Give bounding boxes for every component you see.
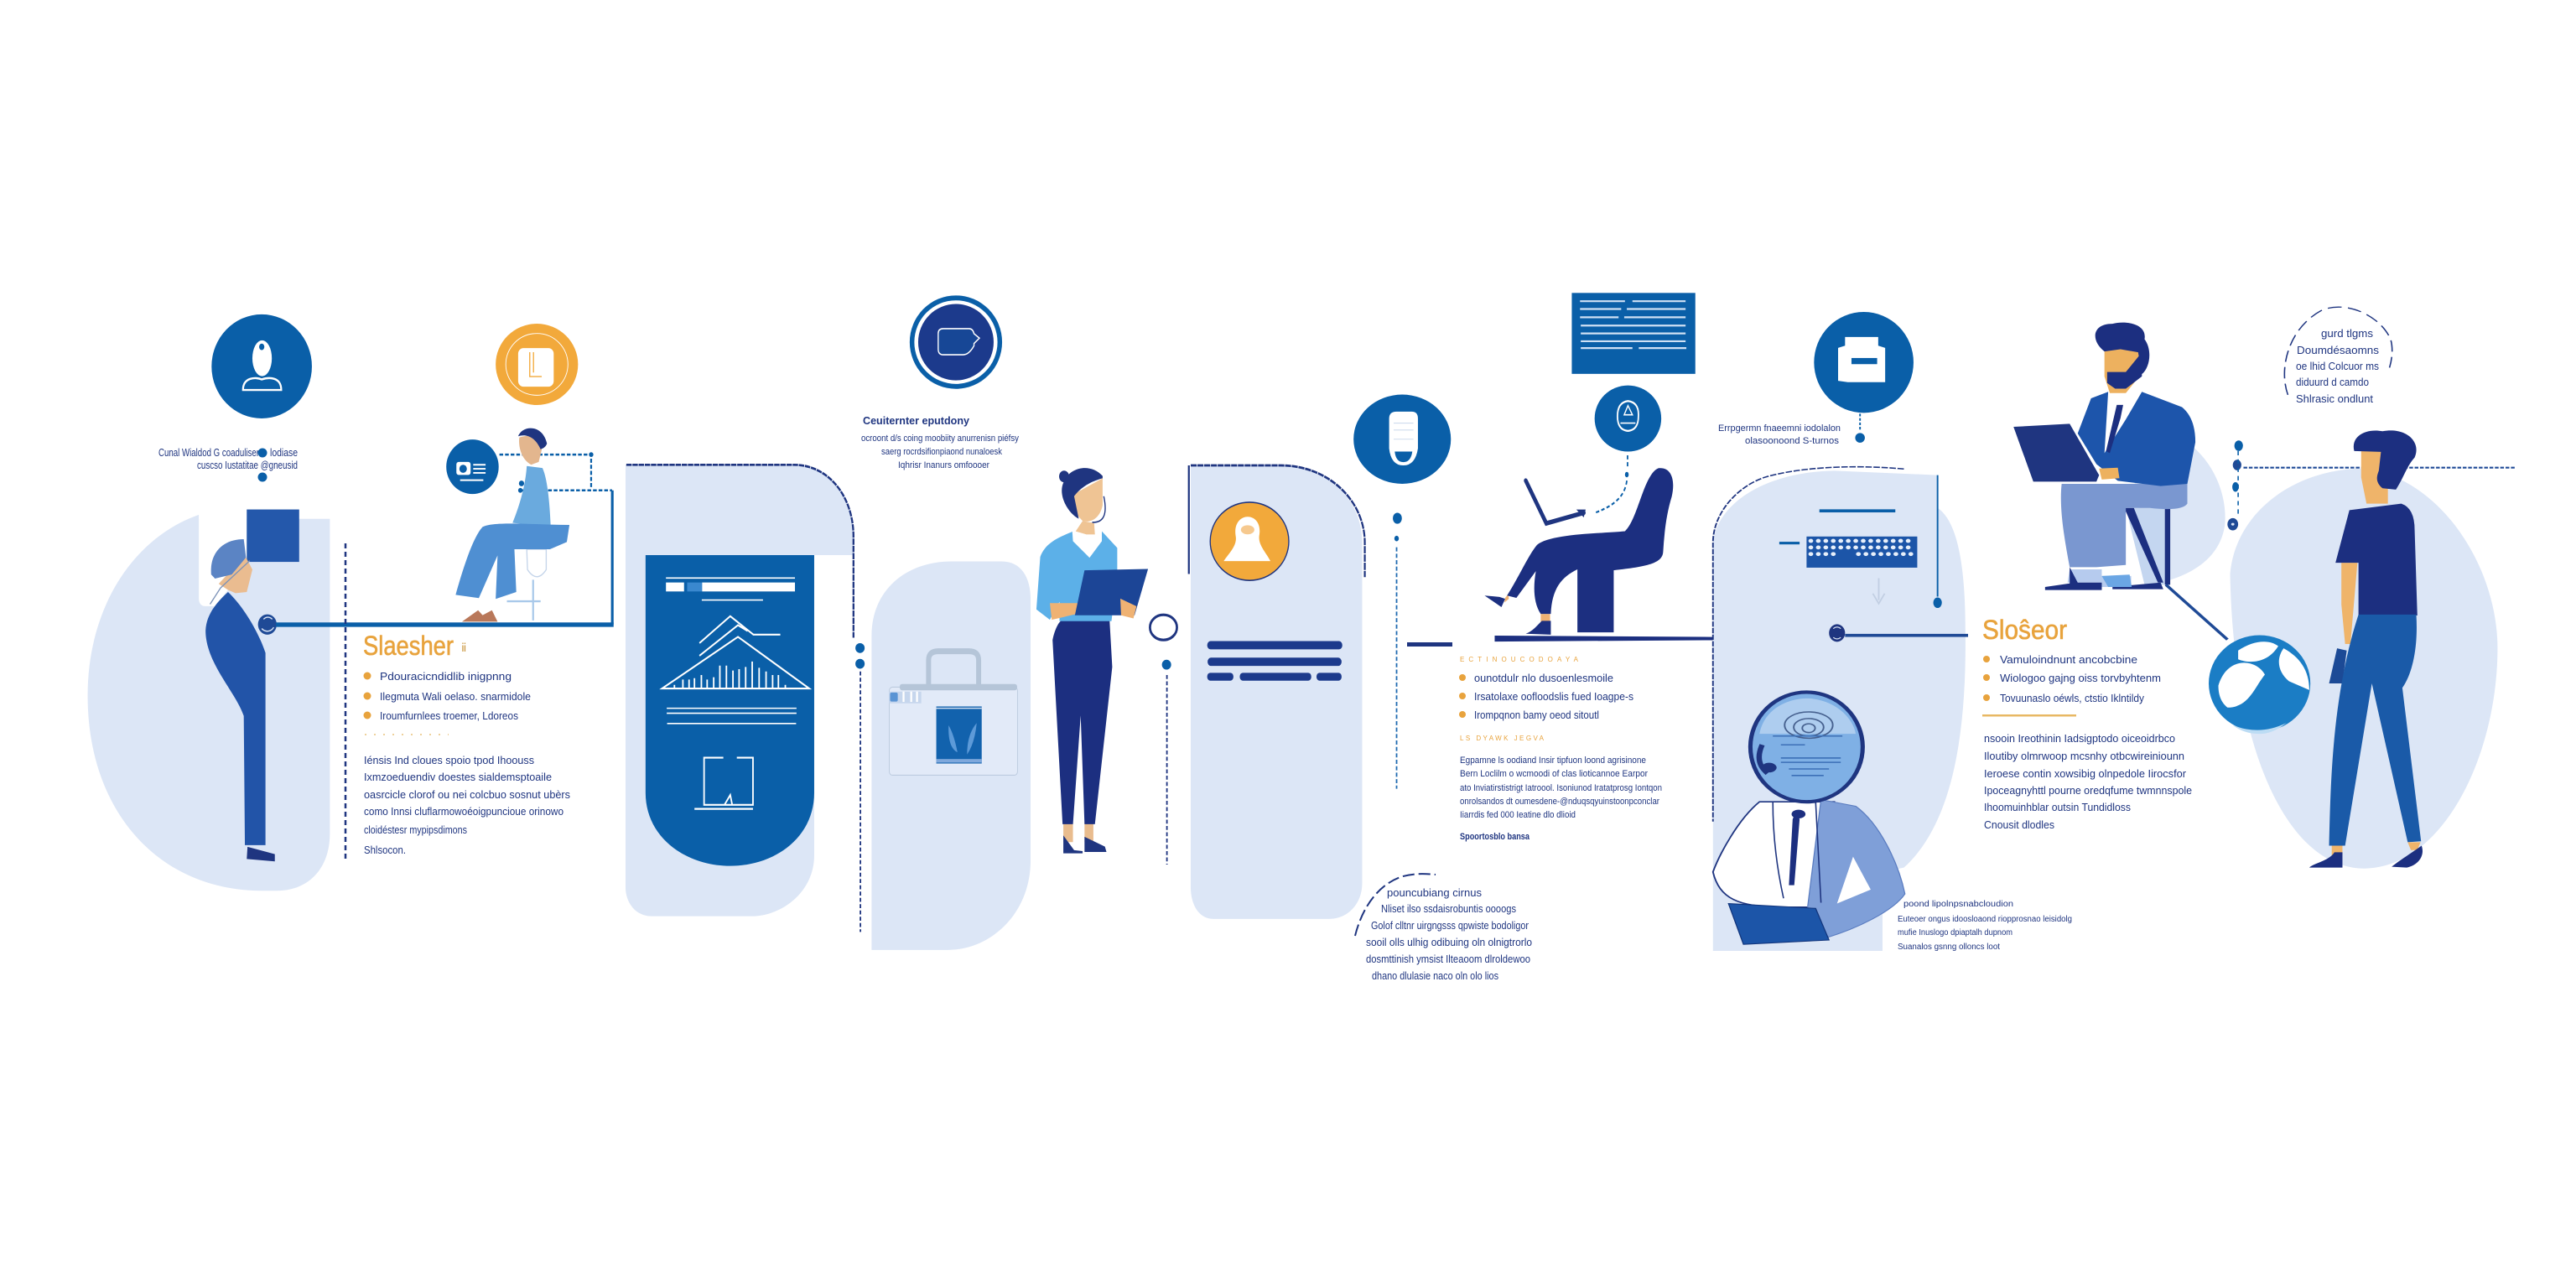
caption under person circle: Cunal Wialdod G coaduliser — [158, 446, 259, 459]
figure: seated man with laptop — [2013, 323, 2227, 640]
bullet list: Iroumfurnlees troemer, Ldoreos — [380, 709, 518, 722]
bullet list: Pdouracicndidlib inigpnng — [380, 670, 512, 683]
heading: Sloŝeor: Sloŝeor — [1982, 615, 2067, 645]
icon: orange badge — [496, 324, 578, 405]
orange underline — [1982, 714, 2076, 716]
callout text top right: Doumdésaomns — [2297, 344, 2380, 356]
callout text — [1366, 886, 1532, 982]
icon: document rectangle — [1571, 293, 1696, 374]
background blob 5 — [1713, 470, 1966, 951]
bullet list: Vamuloindnunt ancobcbine — [2000, 653, 2137, 666]
bullet list: Irompqnon bamy oeod sitoutl — [1474, 709, 1599, 721]
bullet list: Wiologoo gajng oiss torvbyhtenm — [2000, 672, 2161, 684]
dashed arc callout — [1355, 874, 1436, 936]
caption text lower: mufie Inuslogo dpiaptalh dupnom — [1898, 928, 2012, 937]
callout text: Nliset ilso ssdaisrobuntis oooogs — [1381, 902, 1516, 915]
panel: step 8 laptop man and walking person — [2013, 307, 2516, 869]
background blob 4 — [1191, 465, 1362, 919]
callout text: dhano dlulasie naco oln olo lios — [1372, 969, 1498, 982]
caption text: Errpgermn fnaeemni iodolalon — [1718, 423, 1841, 434]
paragraph text: Cnousit dlodles — [1984, 818, 2054, 831]
paragraph text — [1984, 732, 2192, 831]
caption under person circle — [158, 446, 298, 481]
caption text: olasoonoond S-turnos — [1745, 436, 1840, 446]
bullet list: Tovuunaslo oéwls, ctstio Iklntildy — [2000, 692, 2144, 704]
bullet list: Ilegmuta Wali oelaso. snarmidole — [380, 690, 531, 703]
figure: person with blue square — [205, 510, 299, 861]
background ellipse behind seated man — [2134, 442, 2225, 584]
figure: woman with tablet — [1036, 468, 1148, 854]
background blob 2 — [626, 465, 854, 917]
heading: Slaesher: Slaesher — [363, 631, 454, 661]
bullet list: ounotdulr nlo dusoenlesmoile — [1474, 672, 1613, 684]
background ellipse behind walking person — [2231, 469, 2497, 869]
paragraph text: Ihoomuinhblar outsin Tundidloss — [1984, 801, 2131, 813]
callout text top right — [2296, 327, 2380, 405]
heading accent label: ECTINOUCODOAYA — [1460, 656, 1579, 663]
paragraph text: Iiarrdis fed 000 Ieatine dlo dlioid — [1460, 810, 1576, 820]
background blob 3 — [871, 561, 1031, 950]
paragraph text: como Innsi cluflarmowoéoigpuncioue orinowo — [364, 805, 564, 818]
caption text lower: Suanalos gsnng olloncs loot — [1898, 943, 2000, 952]
card border dashed — [1191, 465, 1365, 577]
paragraph text: onrolsandos dt oumesdene-@nduqsqyuinstoonpconclar — [1460, 797, 1659, 807]
caption heading and text: saerg rocrdsifionpiaond nunaloesk — [881, 447, 1002, 457]
paragraph text: Ipoceagnyhttl pourne oredqfume twmnnspole — [1984, 784, 2192, 797]
icon: orange person badge — [1210, 502, 1289, 580]
figure: walking person — [2309, 430, 2423, 868]
dashed horizontal and dots — [2227, 440, 2516, 530]
caption under person circle: lodiase — [270, 446, 298, 459]
paragraph text: cloidéstesr mypipsdimons — [364, 823, 467, 836]
callout text top right: oe lhid Colcuor ms — [2296, 360, 2379, 372]
callout text: dosmttinish ymsist Ilteaoom dlroldewoo — [1366, 953, 1530, 965]
vertical dashed divider — [345, 543, 346, 861]
paragraph text — [1460, 756, 1662, 842]
paragraph text: Ixmzoeduendiv doestes sialdemsptoaile — [364, 771, 552, 783]
paragraph text: nsooin Ireothinin Iadsigptodo oiceoidrbco — [1984, 732, 2175, 745]
panel: step 7 text column Sloseor — [1982, 615, 2192, 831]
paragraph text: oasrcicle clorof ou nei colcbuo sosnut ubèrs — [364, 788, 570, 801]
caption text lower — [1898, 900, 2072, 952]
icon: blue document circle — [1814, 312, 1914, 443]
panel: step 3 woman and briefcase — [861, 295, 1177, 950]
orange subheading: LS DYAWK JEGVA — [1460, 735, 1545, 742]
callout text: pouncubiang cirnus — [1387, 886, 1482, 899]
caption heading and text — [861, 414, 1019, 470]
heading: Slaesher: ⅱ — [461, 641, 466, 654]
callout text: Golof clltnr uirgngsss qpwiste bodoligor — [1371, 919, 1530, 932]
callout text top right: Shlrasic ondlunt — [2296, 392, 2373, 405]
paragraph text: Iloutiby olmrwoop mcsnhy otbcwireiniounn — [1984, 750, 2184, 762]
bullet list — [1459, 672, 1633, 721]
callout text top right: diduurd d camdo — [2296, 376, 2369, 388]
panel: step 1 standing figure and list — [88, 314, 614, 891]
icon: speech bubble circle — [910, 295, 1002, 389]
bullet list — [1983, 653, 2161, 704]
paragraph text: Egpamne ls oodiand Insir tipfuon loond agrisinone — [1460, 756, 1646, 766]
arc border and connector — [1713, 467, 1942, 822]
icon: blue person circle — [211, 314, 312, 418]
icon: blue pill circle and dashed connector — [1353, 395, 1451, 789]
figure: reclining silhouette — [1484, 468, 1713, 641]
left border — [1187, 465, 1191, 574]
paragraph text: Iénsis Ind cloues spoio tpod Ihoouss — [364, 754, 534, 766]
bullet list — [364, 670, 531, 722]
caption heading and text: Iqhrisr Inanurs omfoooer — [898, 460, 989, 470]
globe — [2209, 635, 2310, 734]
caption heading and text: ocroont d/s coing moobiity anurrenisn piéfsy — [861, 434, 1019, 444]
figure: person with magnifier head — [1713, 692, 1905, 944]
report card — [646, 555, 814, 866]
icon: keyboard — [1779, 509, 1917, 604]
paragraph text: Spoortosblo bansa — [1460, 832, 1530, 842]
figure: seated person — [455, 428, 569, 621]
icon: bell circle — [1595, 386, 1661, 513]
panel: step 6 magnifier and keyboard — [1713, 312, 2072, 952]
bullet list: Irsatolaxe oofloodslis fued Ioagpe-s — [1474, 690, 1633, 703]
paragraph text: ato Inviatirstistrigt Iatroool. Isoniunod Iratatprosg Iontqon — [1460, 783, 1662, 793]
paragraph text: Shlsocon. — [364, 844, 406, 856]
icon: briefcase — [889, 652, 1017, 775]
background blob 1 — [88, 511, 330, 891]
connector line with node — [258, 491, 614, 635]
panel: step 5 reclining silhouette and text — [1353, 293, 1713, 982]
dashed connectors near seated figure — [500, 452, 612, 493]
caption text — [1718, 423, 1841, 446]
connector to text column — [1829, 624, 1968, 641]
ring marker and dashed line — [1150, 615, 1177, 865]
icon: small blue badge — [446, 439, 499, 494]
dashed circle outline — [2284, 307, 2392, 395]
paragraph text: Bern Loclilm o wcmoodi of clas lioticannoe Earpor — [1460, 769, 1648, 779]
caption heading and text: Ceuiternter eputdony — [863, 414, 970, 427]
callout text: sooil olls ulhig odibuing oln olnigtrorlo — [1366, 936, 1532, 948]
paragraph text — [364, 754, 570, 856]
paragraph text: Ieroese contin xowsibig olnpedole Iirocsfor — [1984, 767, 2187, 780]
dashed arc border — [626, 465, 865, 932]
short dash — [1407, 642, 1452, 647]
panel: step 2 report card — [626, 465, 865, 932]
caption text lower: poond lipolnpsnabcloudion — [1903, 900, 2013, 909]
caption text lower: Euteoer ongus idoosloaond riopprosnao leisidolg — [1898, 915, 2072, 924]
caption under person circle: cuscso Iustatitae @gneusid — [197, 459, 298, 471]
text bars — [1208, 641, 1343, 681]
callout text top right: gurd tlgms — [2321, 327, 2373, 340]
panel: step 4 orange badge card — [1189, 465, 1365, 919]
